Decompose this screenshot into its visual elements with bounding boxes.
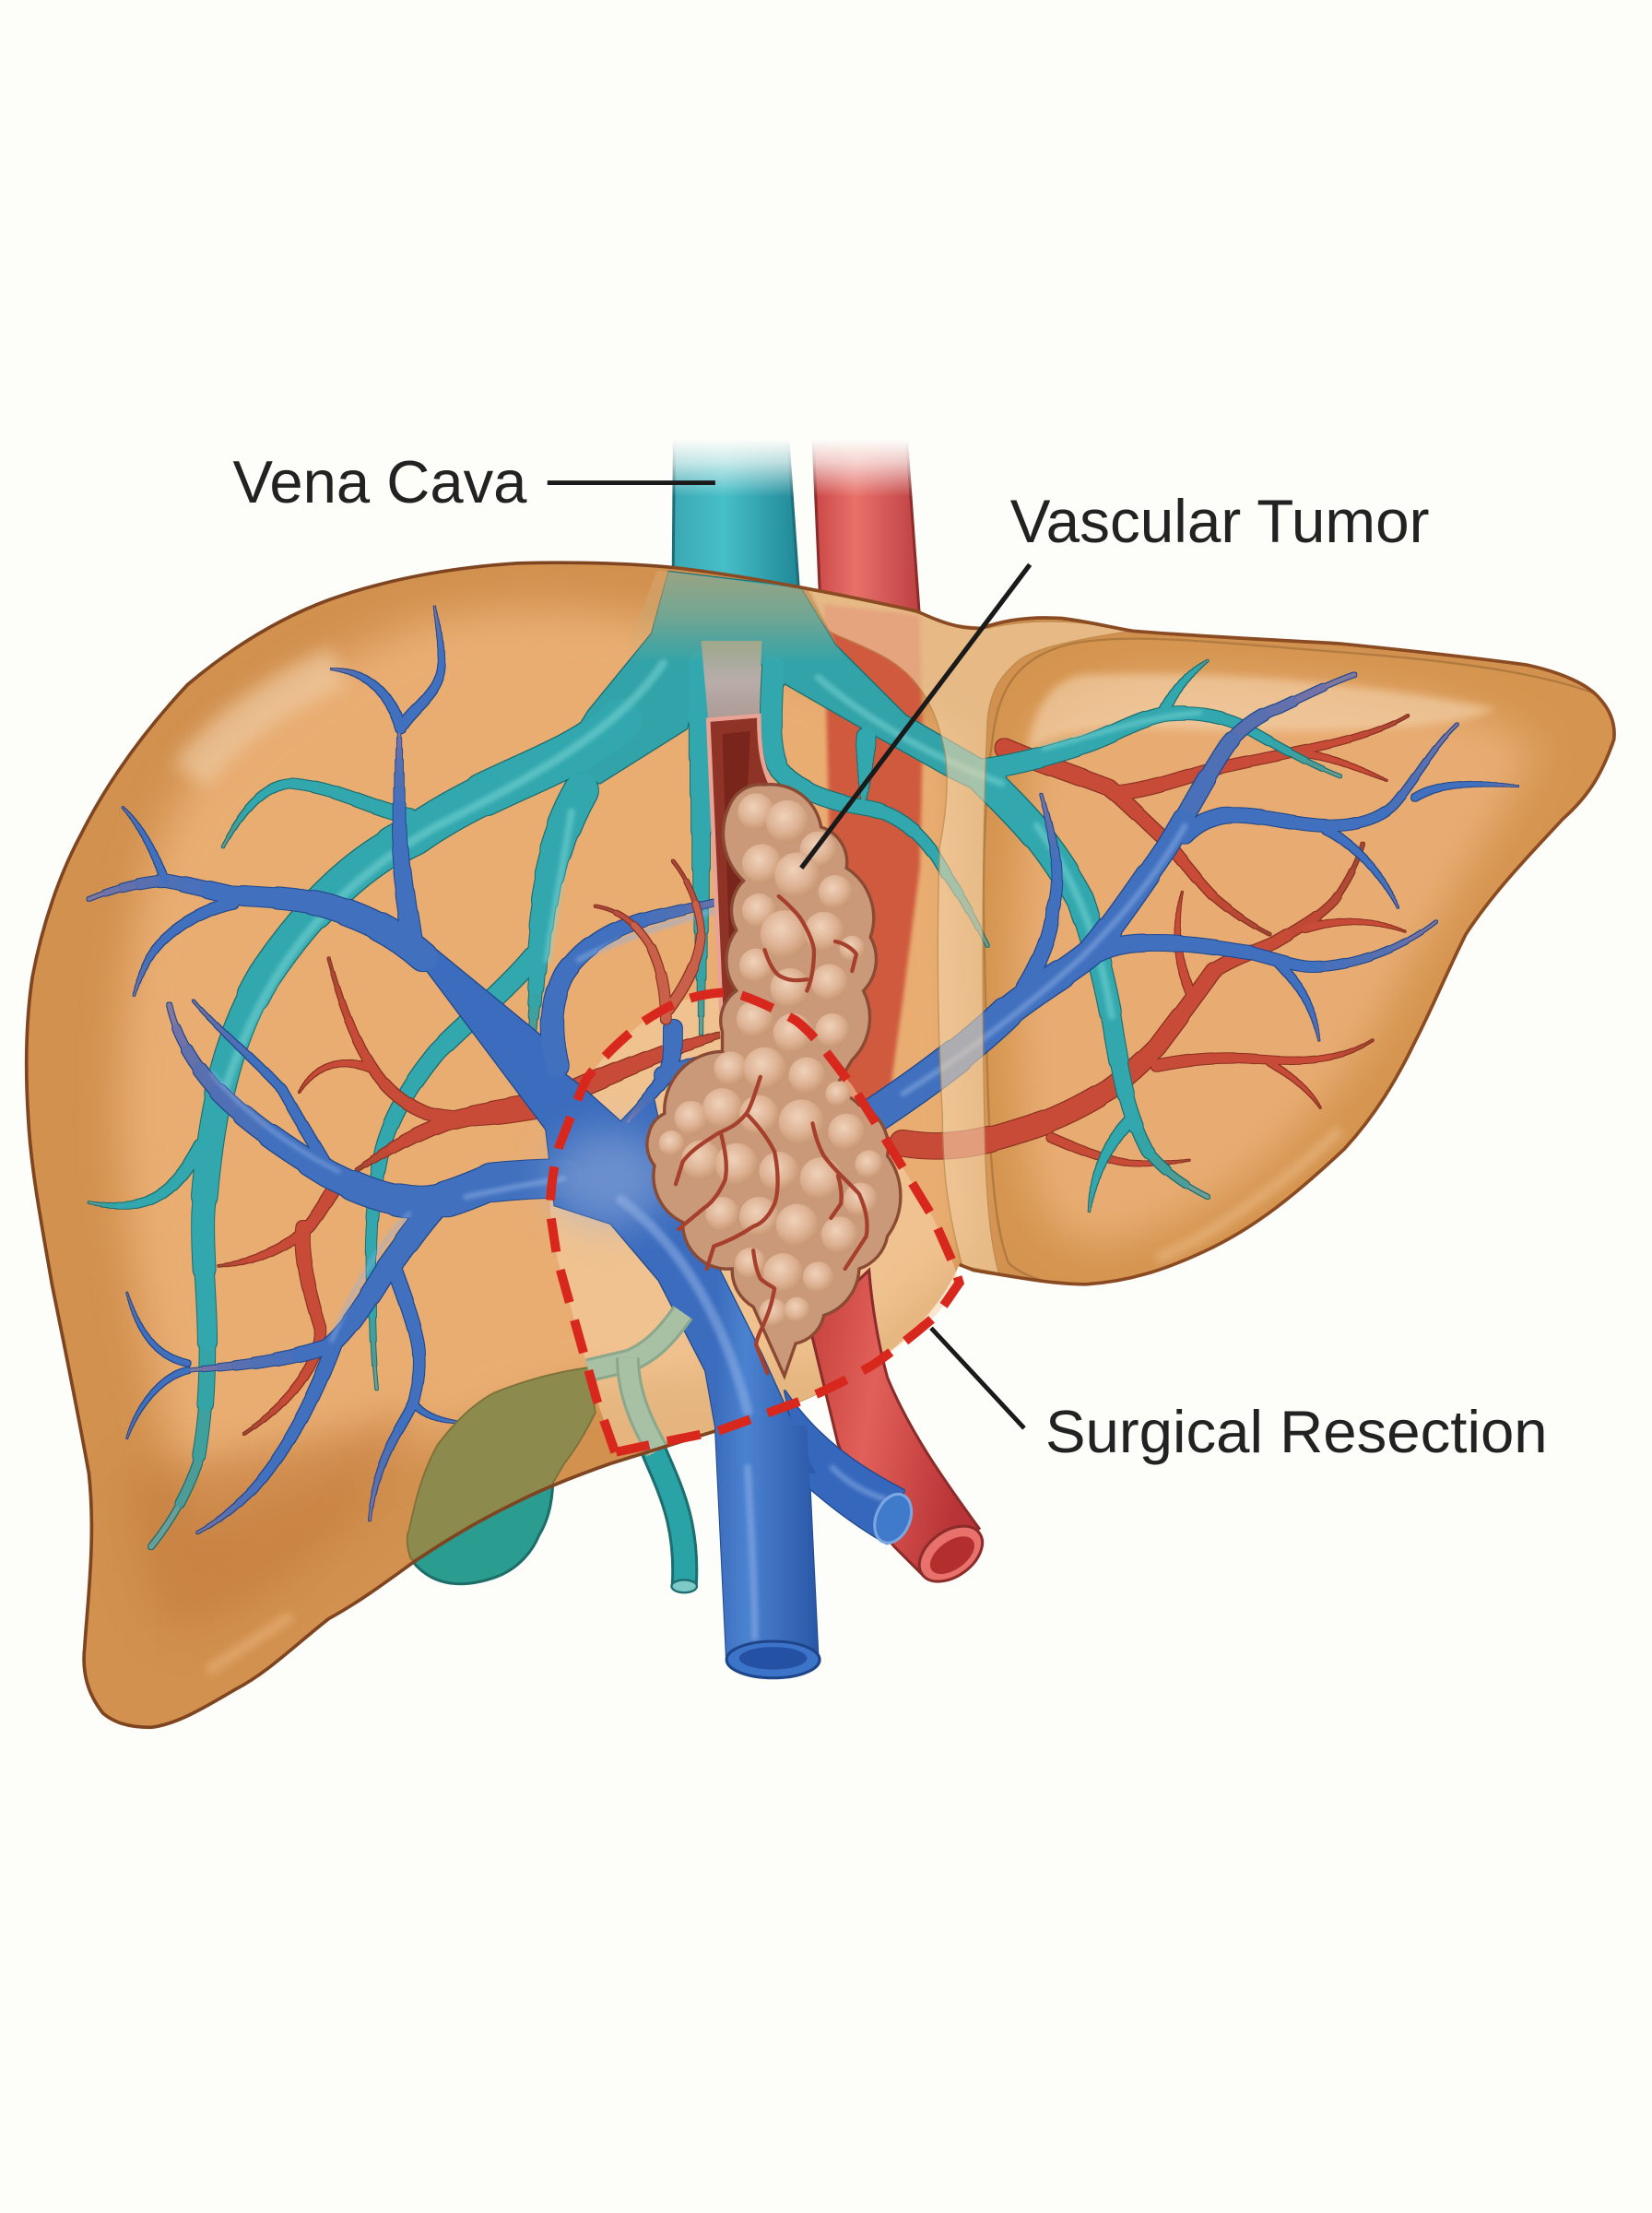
aorta lower segment	[809, 1271, 993, 1592]
lower rim highlight	[207, 1615, 292, 1671]
label: Surgical Resection: Surgical Resection	[1045, 1398, 1548, 1465]
small arteries over portal vein	[596, 861, 702, 1019]
portal vein open ends	[726, 1488, 918, 1678]
left highlight	[191, 667, 338, 776]
liver anatomy diagram	[24, 443, 1616, 1730]
portal vein side tube	[785, 1391, 904, 1544]
hepatic vein sheen	[226, 663, 1199, 1087]
tumor outline	[647, 785, 901, 1376]
right lobe	[984, 639, 1636, 1298]
aorta seen through liver	[824, 604, 923, 1101]
tumor mass	[647, 785, 901, 1376]
fade at top of great vessels	[656, 415, 931, 497]
vena cava upper segment	[673, 426, 800, 607]
resection zone shading	[550, 992, 960, 1452]
label: Vascular Tumor	[801, 488, 1429, 868]
falciform ligament band	[807, 590, 1133, 1273]
surgical resection dashed outline	[550, 992, 960, 1452]
right lobe hepatic arteries	[903, 716, 1408, 1164]
portal vein sheen	[212, 825, 1185, 1637]
hilum liver overlay	[620, 570, 846, 663]
opened vena cava channel	[702, 641, 782, 1037]
label: Vena Cava: Vena Cava	[233, 448, 527, 515]
label: Vascular Tumor: Vascular Tumor	[1010, 488, 1429, 555]
gallbladder inside liver	[407, 1367, 596, 1561]
label: Surgical Resection	[931, 1328, 1548, 1465]
tumor nodules	[659, 793, 883, 1327]
lower left shading	[127, 1412, 423, 1637]
liver body	[28, 564, 1587, 1726]
portal vein network	[88, 607, 1518, 1660]
portal confluence pale patch	[550, 1130, 668, 1226]
left lobe hepatic arteries	[218, 958, 734, 1434]
portal confluence	[413, 931, 816, 1473]
portal vein main stem	[715, 1426, 819, 1660]
tumor surface vessels	[676, 896, 867, 1373]
hepatic vein network	[88, 572, 1340, 1546]
bile duct tube	[649, 1439, 697, 1592]
common bile duct inside liver	[588, 1312, 683, 1450]
gallbladder lower part	[407, 1474, 553, 1584]
left lobe interior	[120, 609, 974, 1532]
liver outline	[27, 562, 1614, 1727]
hepatic vein trunk at hilum	[557, 572, 1008, 799]
aorta upper segment	[812, 426, 920, 621]
